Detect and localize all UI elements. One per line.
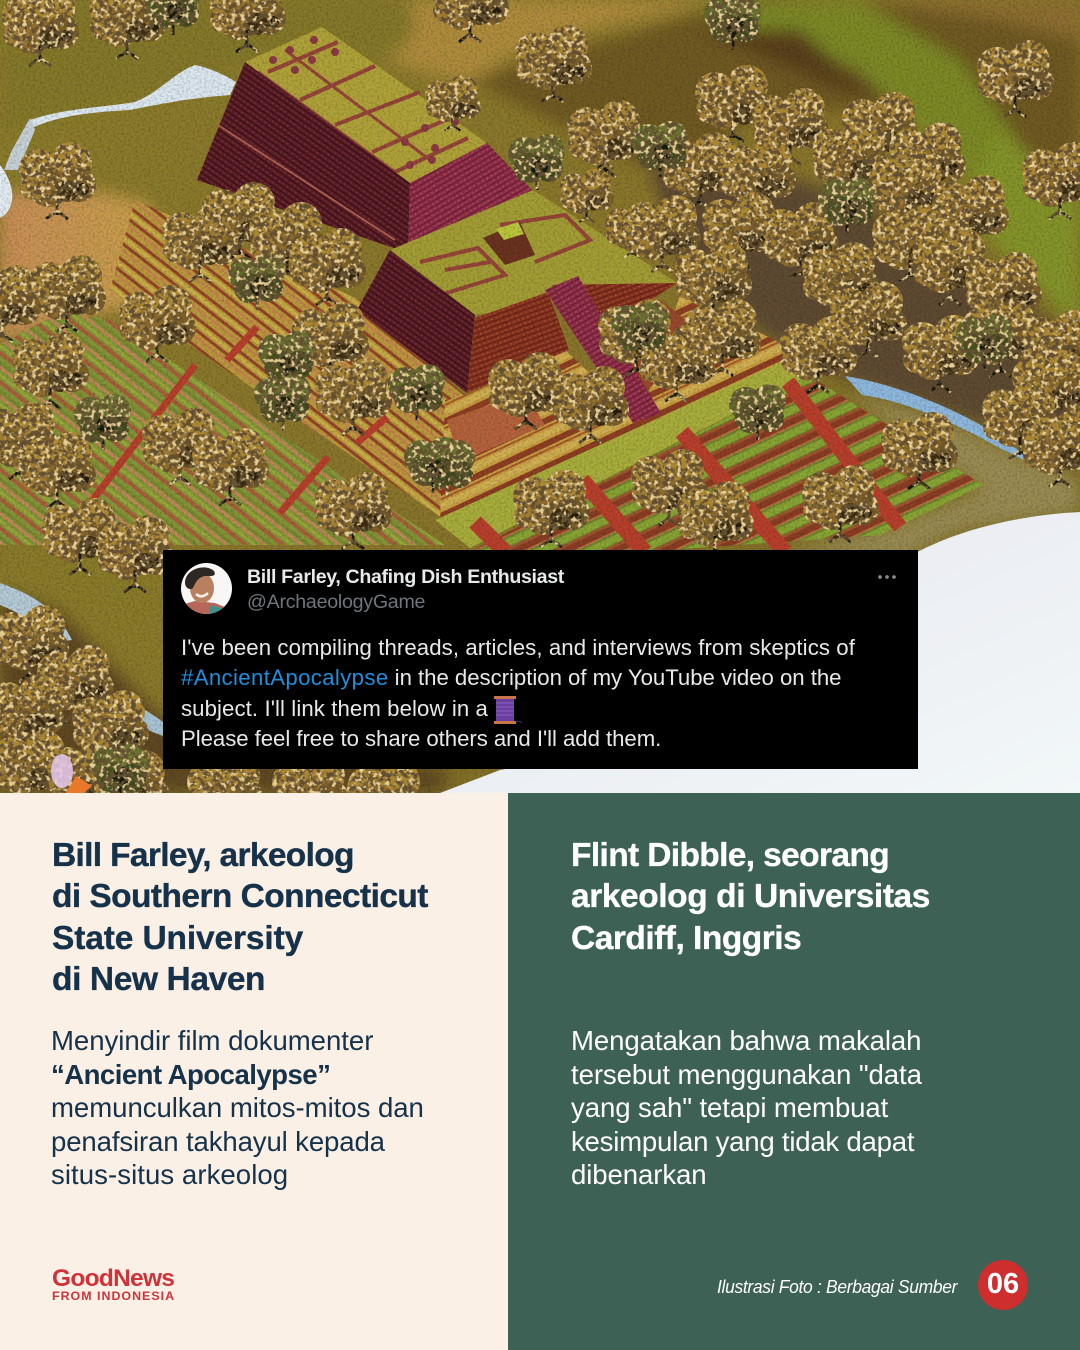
- heading: Bill Farley: State University: [52, 920, 303, 957]
- page number badge: 06: [987, 1268, 1019, 1300]
- tweet author name: Bill Farley, Chafing Dish Enthusiast: [247, 566, 564, 588]
- tweet avatar: [181, 563, 232, 614]
- tweet body: I've been compiling threads, articles, and interviews from skeptics of: [181, 635, 855, 660]
- text: Flint Dibble statement: [571, 1025, 922, 1190]
- tweet body: [181, 635, 855, 751]
- text: Flint Dibble statement: kesimpulan yang tidak dapat: [571, 1126, 914, 1157]
- heading: Flint Dibble: Flint Dibble, seorang: [571, 837, 889, 874]
- pyramid lower tier: [357, 190, 677, 423]
- light flare lower left: [51, 754, 92, 793]
- tweet body: subject. I'll link them below in a: [181, 696, 488, 721]
- rivers: [0, 65, 1040, 736]
- text: Flint Dibble statement: dibenarkan: [571, 1159, 707, 1190]
- logo: GoodNews From Indonesia: FROM INDONESIA: [52, 1289, 175, 1303]
- text: Bill Farley statement: [51, 1025, 424, 1190]
- text: Flint Dibble statement: tersebut menggunakan "data: [571, 1059, 922, 1090]
- dark green trees: [74, 0, 1013, 800]
- heading: Flint Dibble: arkeolog di Universitas: [571, 878, 930, 915]
- heading: Bill Farley: [52, 837, 428, 998]
- field right: [470, 375, 983, 552]
- heading: Bill Farley: Bill Farley, arkeolog: [52, 837, 354, 874]
- golden trees: [0, 0, 1080, 837]
- tweet body: #AncientApocalypse in the description of my YouTube video on the: [181, 665, 842, 690]
- ground terrain: [0, 0, 1080, 793]
- panel: Bill Farley: [0, 793, 508, 1350]
- text: Bill Farley statement: penafsiran takhayul kepada: [51, 1126, 385, 1157]
- tweet card: [163, 550, 918, 769]
- tweet handle: @ArchaeologyGame: [247, 591, 425, 613]
- pyramid upper tier: [197, 27, 535, 253]
- snowy water lower right: [440, 512, 1080, 793]
- golden terraces left: [110, 200, 470, 520]
- red field paths: [85, 327, 900, 552]
- grain texture: [0, 0, 1080, 793]
- photo credit: Ilustrasi Foto : Berbagai Sumber: [717, 1276, 957, 1297]
- heading: Bill Farley: di Southern Connecticut: [52, 878, 428, 915]
- text: Flint Dibble statement: yang sah" tetapi membuat: [571, 1092, 888, 1123]
- logo: GoodNews From Indonesia: GoodNews: [52, 1265, 174, 1292]
- page number badge: [978, 1260, 1028, 1310]
- text: Flint Dibble statement: Mengatakan bahwa makalah: [571, 1025, 921, 1056]
- tweet more menu: [878, 575, 899, 579]
- green field left: [0, 312, 445, 545]
- text: Bill Farley statement: situs-situs arkeolog: [51, 1159, 288, 1190]
- heading: Bill Farley: di New Haven: [52, 961, 265, 998]
- text: Bill Farley statement: Menyindir film dokumenter: [51, 1025, 373, 1056]
- ground base: [0, 0, 1080, 793]
- heading: Flint Dibble: Cardiff, Inggris: [571, 920, 801, 957]
- panel: Flint Dibble: [508, 793, 1080, 1350]
- text: Bill Farley statement: “Ancient Apocalypse”: [51, 1059, 330, 1090]
- tweet body: Please feel free to share others and I'll add them.: [181, 726, 661, 751]
- heading: Flint Dibble: [571, 837, 930, 957]
- text: Bill Farley statement: memunculkan mitos-mitos dan: [51, 1092, 424, 1123]
- middle terraces: [435, 295, 815, 548]
